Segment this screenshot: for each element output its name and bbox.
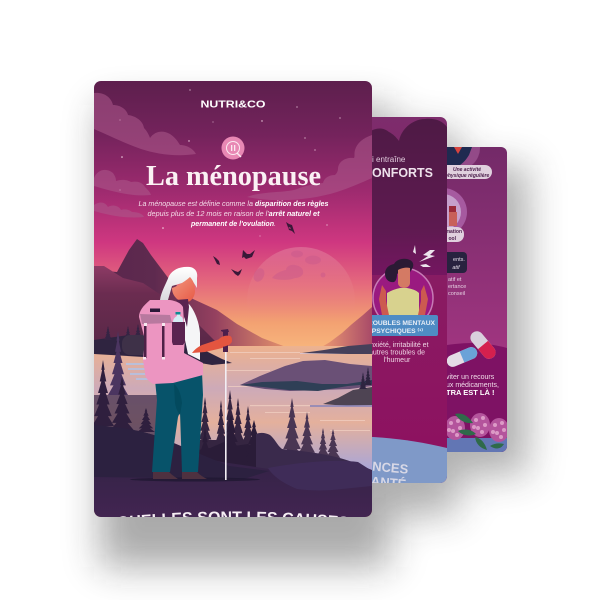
logo: nutri&co: NUTRI&CO [200, 98, 266, 110]
arm [192, 338, 231, 353]
island trees right [359, 367, 372, 389]
hiker [130, 267, 260, 482]
infographic: stacked cards [76, 81, 550, 591]
text: symptoms: Anxiété, irritabilité et [365, 342, 429, 349]
heading: clipped footer: NCES [372, 459, 409, 477]
card: main page [94, 81, 372, 517]
icon: drink in circle [447, 188, 467, 228]
stars [119, 89, 341, 237]
face [172, 277, 195, 302]
intro paragraph: La ménopause est définie comme la disparition des règles [138, 199, 328, 208]
intro paragraph: depuis plus de 12 mois en raison de l'arrêt naturel et [148, 209, 320, 218]
text block: note [448, 277, 466, 297]
icon: clover flowers [445, 413, 509, 450]
heading: inconforts: ONFORTS [372, 165, 433, 180]
forest right [281, 398, 342, 463]
hand [219, 336, 232, 347]
shirt [182, 303, 200, 360]
birds [213, 222, 295, 276]
backpack [139, 300, 203, 384]
hiker shadow [130, 478, 260, 482]
badge: dark note [447, 252, 467, 273]
clipped footer heading: QUELLES SONT LES CAUSES [120, 511, 346, 517]
text: medication message: viter un recours [446, 374, 495, 381]
label: physical activity: Une activité [453, 167, 481, 173]
text block: note: ertance [448, 284, 466, 290]
island small lower right [323, 387, 372, 406]
icon: pause in magnifier [222, 136, 244, 160]
footer band [372, 436, 447, 483]
text: symptoms: autres troubles de [369, 350, 425, 356]
banner: troubles mentaux [372, 315, 438, 336]
badge: dark note: atif [452, 265, 460, 271]
lake [94, 346, 372, 476]
label: alcohol: ool [448, 236, 457, 242]
text: medication message: ux médicaments, [446, 382, 499, 389]
text block: note: conseil [448, 291, 465, 297]
tree clusters [105, 324, 144, 395]
heading: clipped footer [372, 462, 408, 483]
front mountain left [94, 266, 222, 348]
text: symptoms: l'humeur [384, 357, 411, 364]
label: physical activity [447, 165, 492, 179]
icon: woman with headache [372, 245, 435, 315]
banner: troubles mentaux: PSYCHIQUES ⁽¹⁾ [372, 327, 423, 335]
badge: dark note: ents. [453, 257, 465, 263]
pocket and bottle [172, 322, 185, 345]
heading: inconforts: i entraîne [372, 155, 406, 164]
forest near lake middle [199, 390, 252, 450]
text: medication message: TRA EST LÀ ! [446, 388, 494, 397]
label: alcohol: mation [446, 229, 462, 235]
text: symptoms [372, 342, 428, 362]
title: La ménopause [146, 161, 321, 192]
banner: troubles mentaux: TROUBLES MENTAUX [364, 320, 436, 327]
intro paragraph: permanent de l'ovulation. [190, 219, 276, 228]
label: alcohol [447, 227, 464, 242]
hill near forest [256, 433, 372, 485]
island middle right [240, 360, 372, 391]
card: third page (back) [447, 147, 507, 452]
dark forest left [92, 360, 159, 435]
text: medication message [446, 374, 499, 397]
heading: clipped footer: ANTÉ [370, 474, 407, 492]
heading: inconforts [372, 156, 432, 177]
sparkling water left [126, 363, 148, 380]
boots [153, 472, 207, 479]
lower band [447, 343, 507, 452]
water reflections [225, 352, 370, 431]
trekking pole [225, 350, 227, 480]
drop shadow behind the cards [100, 105, 528, 567]
sky background [94, 81, 372, 517]
far island right [302, 344, 372, 354]
foreground mound [268, 461, 372, 490]
moon [250, 247, 352, 284]
hair [160, 267, 197, 301]
ground [94, 425, 372, 517]
foreground forest edge [94, 425, 269, 479]
intro paragraph [138, 199, 328, 228]
right mountain [324, 307, 372, 346]
flower band [447, 438, 507, 452]
dark cloud header [372, 118, 447, 275]
neck scarf [176, 299, 189, 327]
back mountain [112, 239, 283, 346]
clouds [94, 93, 372, 218]
icon: active person [447, 147, 480, 165]
card: second page (middle) [372, 117, 447, 483]
icon: pills [447, 331, 496, 367]
far shoreline left [94, 335, 232, 365]
label: physical activity: physique régulière [444, 173, 489, 179]
pants [152, 372, 203, 472]
text block: note: atif et [448, 277, 462, 283]
